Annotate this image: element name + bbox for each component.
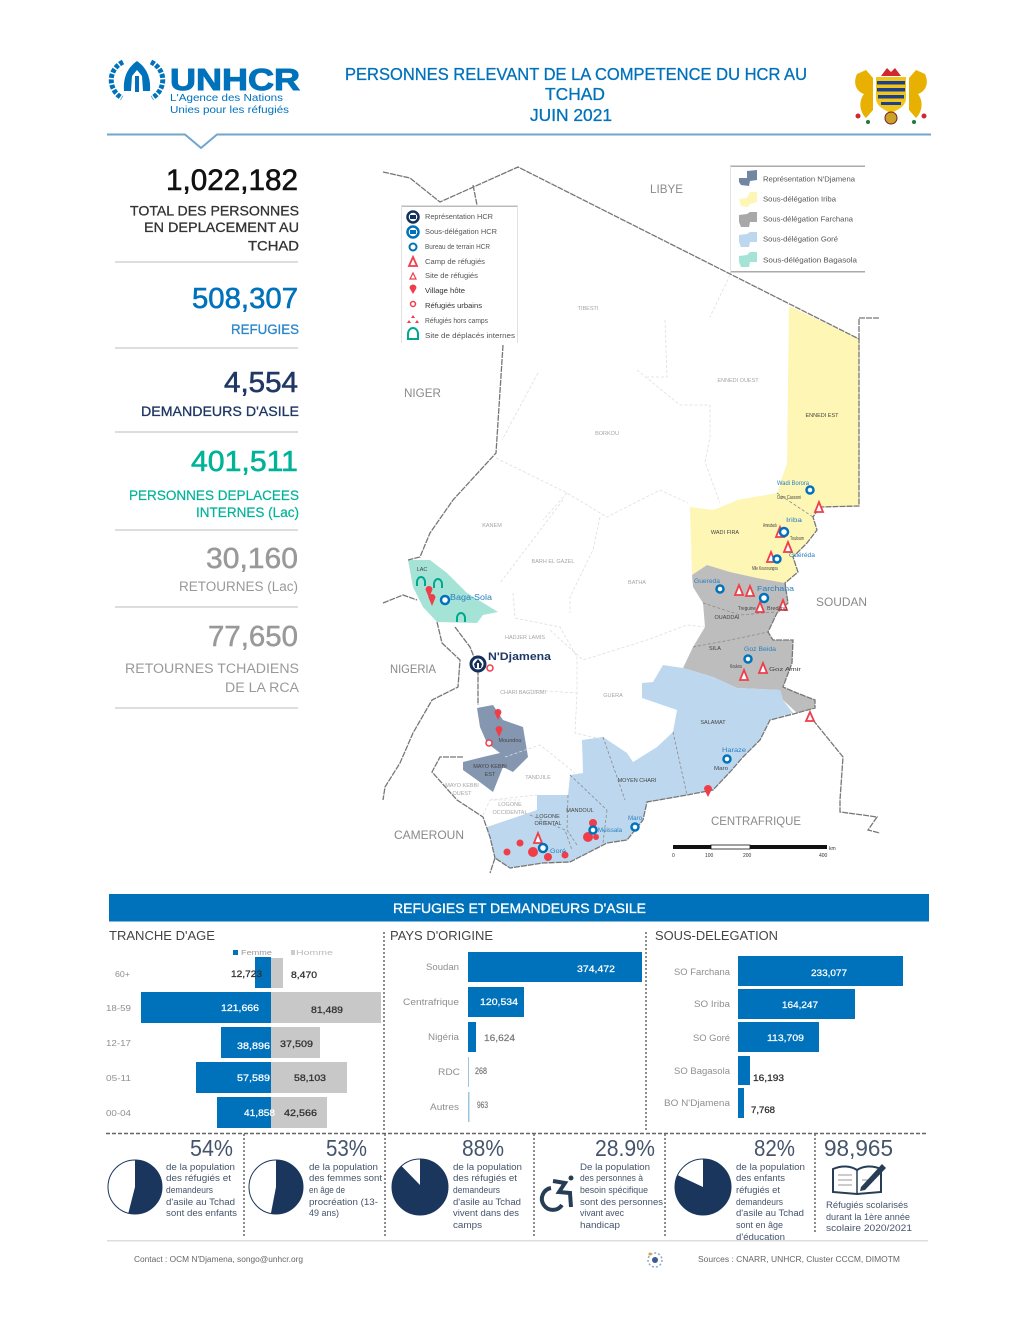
stat block: children 54%: des réfugiés et (166, 1173, 232, 1183)
office labels: Moundou (499, 738, 521, 744)
legend: symbols: Site de déplacés internes (425, 333, 516, 340)
footer contact: Contact : OCM N'Djamena, songo@unhcr.org (134, 1255, 303, 1264)
stat block: women 53%: en âge de (309, 1185, 345, 1195)
stat block: disability 28.9%: besoin spécifique (580, 1185, 648, 1195)
province labels: MAYO KEBBI (473, 764, 507, 770)
province labels: EST (485, 772, 496, 778)
chart: sub-delegation: 16,193 (753, 1073, 784, 1084)
stat block: camps 88%: camps (453, 1220, 483, 1230)
pie 54% (108, 1160, 162, 1214)
chart: age pyramid: 8,470 (291, 970, 317, 981)
office labels: Guéréda (789, 553, 816, 559)
province labels: TIBESTI (578, 306, 599, 312)
legend: symbols: Réfugiés hors camps (425, 318, 488, 325)
chart: sub-delegation: 113,709 (767, 1033, 804, 1044)
chart: age pyramid: 41,858 (244, 1108, 275, 1119)
stat: returnees Lac (179, 543, 298, 594)
stat block: camps 88%: vivent dans des (453, 1208, 520, 1218)
stat block: education 82%: de la population (736, 1162, 805, 1172)
legend: symbols: Représentation HCR (425, 214, 493, 221)
stat: asylum seekers: 4,554 (224, 367, 298, 399)
banner: REFUGIES ET DEMANDEURS D'ASILE (393, 901, 646, 916)
province labels: ENNEDI EST (805, 413, 839, 419)
office labels: Guereda (694, 579, 721, 585)
chart: sub-delegation: SO Bagasola (674, 1066, 730, 1076)
country labels: CAMEROUN (394, 828, 464, 842)
province labels: MAYO KEBBI (445, 783, 479, 789)
scale bar: km (829, 846, 836, 852)
stat: IDPs: PERSONNES DEPLACEES (129, 488, 299, 503)
stat block: children 54%: d'asile au Tchad (166, 1197, 235, 1207)
stat: returnees Lac: 30,160 (206, 543, 298, 575)
stat block: schooled 98,965 (824, 1135, 912, 1233)
red refugee pin markers (426, 586, 712, 861)
chart: age pyramid: 38,896 (237, 1041, 270, 1052)
urban refugee pins (486, 665, 493, 746)
province labels: GUERA (603, 693, 623, 699)
legend: symbols: Village hôte (425, 288, 465, 295)
stat block: education 82%: d'éducation (736, 1232, 785, 1242)
stat block: education 82%: demandeurs (736, 1197, 783, 1207)
chart: age pyramid: 81,489 (311, 1005, 343, 1016)
office labels: Haraze (722, 748, 747, 754)
stat block: children 54% (108, 1135, 238, 1218)
stat block: camps 88%: de la population (453, 1162, 522, 1172)
stat block: women 53%: 53% (326, 1135, 367, 1161)
legend: sub-delegations: Sous-délégation Goré (763, 236, 838, 244)
stat block: schooled 98,965: 98,965 (824, 1135, 893, 1161)
province labels: MOYEN CHARI (618, 778, 657, 784)
internal boundaries (483, 275, 813, 850)
chart: age pyramid: 18-59 (106, 1004, 132, 1013)
chart: country of origin (390, 928, 642, 1122)
red camp markers (534, 502, 823, 843)
stat block: camps 88%: 88% (462, 1135, 504, 1161)
province labels: MANDOUL (566, 808, 594, 814)
province labels: LOGONE (536, 814, 560, 820)
legend: symbols: Réfugiés urbains (425, 303, 483, 310)
chart: age pyramid: 00-04 (106, 1109, 132, 1118)
stat: refugees (192, 283, 299, 337)
stat block: disability 28.9%: handicap (580, 1220, 620, 1230)
stat: IDPs: 401,511 (191, 446, 298, 478)
chart: age pyramid: 12-17 (106, 1039, 132, 1048)
province labels: ENNEDI OUEST (717, 378, 759, 384)
legend: symbols: Sous-délégation HCR (425, 229, 497, 236)
stat block: disability 28.9%: des personnes à (580, 1173, 643, 1183)
legend: symbols: Bureau de terrain HCR (425, 244, 490, 251)
pie 88% (392, 1159, 448, 1215)
chart: sub-delegation: 164,247 (782, 1000, 818, 1011)
province labels: TANDJILE (525, 775, 551, 781)
chart: country of origin: 963 (477, 1100, 488, 1111)
icon: wheelchair (542, 1176, 574, 1210)
chart: sub-delegation (655, 928, 903, 1118)
office labels: Wadi Borora (777, 481, 810, 487)
legend: symbols: Site de réfugiés (425, 273, 479, 280)
stat block: children 54%: demandeurs (166, 1185, 213, 1195)
province labels: WADI FIRA (711, 530, 739, 536)
country labels: SOUDAN (816, 595, 867, 609)
legend: sub-delegations: Représentation N'Djamena (763, 176, 855, 184)
stat: total: EN DEPLACEMENT AU (144, 219, 299, 235)
country labels: CENTRAFRIQUE (711, 814, 801, 828)
stat block: education 82% (675, 1135, 805, 1242)
office labels: Bredjing (767, 606, 787, 612)
chart: country of origin: 374,472 (577, 964, 615, 975)
scale bar: 100 (705, 853, 714, 859)
office labels (450, 481, 816, 855)
chart: age pyramid: 42,566 (284, 1108, 317, 1119)
stat: asylum seekers: DEMANDEURS D'ASILE (141, 404, 299, 419)
office labels: Oure Cassoni (777, 495, 801, 501)
chart: age pyramid: 05-11 (106, 1074, 132, 1083)
legend: symbols: Camp de réfugiés (425, 259, 486, 266)
age legend (233, 950, 333, 957)
icon: book and pencil (833, 1164, 886, 1194)
title: TCHAD (545, 84, 605, 104)
pie 82% (675, 1159, 731, 1215)
province labels: CHARI BAGUIRMI (500, 690, 546, 696)
stat block: disability 28.9%: vivant avec (580, 1208, 624, 1218)
office labels: Iriba (786, 518, 803, 524)
stat block: education 82%: des enfants (736, 1173, 786, 1183)
region: Farchana sub-delegation (683, 565, 815, 713)
stat block: schooled 98,965: durant la 1ère année (826, 1212, 910, 1222)
chart: age pyramid: 58,103 (294, 1073, 326, 1084)
teal camp markers (417, 577, 465, 622)
legend: sub-delegations (730, 166, 865, 272)
province labels: OCCIDENTAL (492, 810, 528, 816)
province labels: OUEST (453, 791, 472, 797)
stat block: camps 88% (392, 1135, 522, 1230)
chart: country of origin: RDC (438, 1067, 461, 1077)
province labels: OUADDAI (714, 615, 740, 621)
chart: country of origin: Centrafrique (403, 997, 459, 1007)
country labels: NIGER (404, 386, 441, 400)
chart: age pyramid: 121,666 (221, 1003, 259, 1014)
age legend: Homme (296, 950, 333, 957)
stat block: education 82%: d'asile au Tchad (736, 1208, 804, 1218)
scale bar: 200 (743, 853, 752, 859)
UNHCR logo (111, 61, 300, 116)
stat: refugees: REFUGIES (231, 322, 299, 337)
banner (109, 894, 929, 922)
office labels: Goz Amir (769, 667, 802, 673)
chart: sub-delegation: SOUS-DELEGATION (655, 928, 778, 943)
chart: sub-delegation: SO Farchana (674, 967, 730, 977)
chart: age pyramid: 60+ (115, 970, 130, 979)
chart: age pyramid (106, 928, 381, 1128)
stat block: schooled 98,965: scolaire 2020/2021 (826, 1223, 912, 1233)
province labels: HADJER LAMIS (505, 635, 545, 641)
province labels: ORIENTAL (534, 821, 562, 827)
region: Baga-Sola sub-delegation (408, 560, 498, 623)
age legend: Femme (241, 950, 272, 957)
N'Djamena marker: N'Djamena (488, 651, 552, 663)
chart: age pyramid: TRANCHE D'AGE (109, 928, 215, 943)
office labels: Baga-Sola (450, 593, 493, 602)
stat: returnees CAR: DE LA RCA (225, 680, 299, 695)
chart: sub-delegation: 233,077 (811, 968, 847, 979)
title: JUIN 2021 (530, 105, 612, 125)
stat: total: TOTAL DES PERSONNES (130, 202, 299, 218)
office labels: Mile Kounoungou (752, 566, 778, 572)
province labels: SILA (709, 646, 721, 652)
province labels: KANEM (482, 523, 502, 529)
stat block: schooled 98,965: Réfugiés scolarisés (826, 1200, 909, 1210)
chart: country of origin: 16,624 (484, 1033, 515, 1044)
chart: age pyramid: 57,589 (237, 1073, 270, 1084)
stat block: camps 88%: d'asile au Tchad (453, 1197, 521, 1207)
stat block: education 82%: sont en âge (736, 1220, 783, 1230)
chart: sub-delegation: BO N'Djamena (664, 1098, 730, 1108)
footer sources: Sources : CNARR, UNHCR, Cluster CCCM, DIMOTM (698, 1255, 900, 1264)
province labels: BATHA (628, 580, 646, 586)
map of Chad (383, 166, 880, 873)
stat: refugees: 508,307 (192, 283, 298, 315)
stat: returnees CAR (125, 621, 299, 695)
pie 53% (249, 1160, 303, 1214)
chart: age pyramid: 37,509 (280, 1039, 313, 1050)
province labels: LOGONE (498, 802, 522, 808)
stat: returnees CAR: 77,650 (208, 621, 298, 653)
UNHCR logo: UNHCR (170, 62, 300, 97)
N'Djamena marker (471, 651, 552, 671)
stat block: education 82%: réfugiés et (736, 1185, 781, 1195)
stat block: camps 88%: demandeurs (453, 1185, 500, 1195)
office labels: Touloum (790, 536, 804, 542)
province labels: SALAMAT (700, 720, 726, 726)
chart: country of origin: 120,534 (480, 997, 518, 1008)
office labels: Amnaback (763, 523, 777, 529)
icon: Chad coat of arms (855, 68, 927, 124)
province labels: BORKOU (595, 431, 619, 437)
office labels: Maro (628, 816, 643, 822)
stat: returnees Lac: RETOURNES (Lac) (179, 579, 298, 594)
stat block: women 53%: des femmes sont (309, 1173, 383, 1183)
office labels: Goré (550, 849, 567, 855)
title (345, 64, 807, 125)
legend: sub-delegations: Sous-délégation Bagasola (763, 258, 857, 264)
region: N'Djamena representation (463, 705, 528, 792)
province labels: BARH EL GAZEL (532, 559, 574, 565)
chart: sub-delegation: SO Goré (693, 1033, 730, 1043)
scale bar: 400 (819, 853, 828, 859)
stat block: women 53%: de la population (309, 1162, 378, 1172)
stat block: women 53% (249, 1135, 383, 1218)
stat: returnees CAR: RETOURNES TCHADIENS (125, 661, 299, 676)
chart: country of origin: PAYS D'ORIGINE (390, 928, 493, 943)
office labels: Goz Beida (744, 647, 777, 653)
office labels: Koukou (730, 664, 742, 670)
chart: country of origin: Autres (430, 1102, 460, 1112)
chart: sub-delegation: SO Iriba (694, 999, 730, 1009)
stat block: women 53%: procréation (13- (309, 1197, 378, 1207)
stat block: disability 28.9% (542, 1135, 664, 1230)
stat block: disability 28.9%: sont des personnes (580, 1197, 664, 1207)
international borders (383, 167, 880, 873)
chart: country of origin: 268 (475, 1066, 487, 1077)
stat: total (130, 164, 299, 254)
scale bar (672, 845, 836, 859)
chart: country of origin: Soudan (426, 962, 459, 972)
icon: cluster logo (648, 1252, 662, 1267)
region: Iriba sub-delegation (690, 306, 859, 583)
chart: sub-delegation: 7,768 (751, 1105, 775, 1116)
country labels (390, 182, 867, 842)
office labels: Maro (714, 766, 728, 772)
stat: total: 1,022,182 (166, 164, 298, 197)
region: Goré sub-delegation (487, 665, 793, 868)
stat: asylum seekers (141, 367, 299, 419)
UNHCR logo: L'Agence des Nations (170, 93, 283, 104)
province labels (417, 306, 839, 827)
legend: sub-delegations: Sous-délégation Farchana (763, 216, 853, 224)
legend: symbols (401, 206, 518, 343)
stat: IDPs (129, 446, 299, 520)
stat: total: TCHAD (248, 238, 299, 254)
stat block: education 82%: 82% (754, 1135, 795, 1161)
chart: age pyramid: 12,723 (231, 969, 262, 980)
stat: IDPs: INTERNES (Lac) (196, 505, 299, 520)
office labels: Moissala (598, 828, 623, 834)
UNHCR logo: Unies pour les réfugiés (170, 105, 289, 116)
stat block: children 54%: sont des enfants (166, 1208, 238, 1218)
key figures panel (115, 164, 299, 709)
office labels: Farchana (757, 584, 795, 593)
office labels: Treguine (738, 606, 756, 612)
stat block: children 54%: 54% (190, 1135, 233, 1161)
country labels: LIBYE (650, 182, 683, 196)
stat block: women 53%: 49 ans) (309, 1208, 339, 1218)
stat block: camps 88%: des réfugiés et (453, 1173, 518, 1183)
header (107, 61, 931, 148)
stat block: disability 28.9%: 28.9% (595, 1135, 655, 1161)
chart: country of origin: Nigéria (428, 1032, 459, 1042)
stat block: disability 28.9%: De la population (580, 1162, 650, 1172)
province labels: LAC (417, 567, 427, 573)
country labels: NIGERIA (390, 662, 436, 676)
legend: sub-delegations: Sous-délégation Iriba (763, 196, 836, 204)
scale bar: 0 (672, 853, 675, 859)
title: PERSONNES RELEVANT DE LA COMPETENCE DU HCR AU (345, 64, 807, 84)
blue HCR office markers (441, 486, 814, 852)
stat block: children 54%: de la population (166, 1162, 235, 1172)
